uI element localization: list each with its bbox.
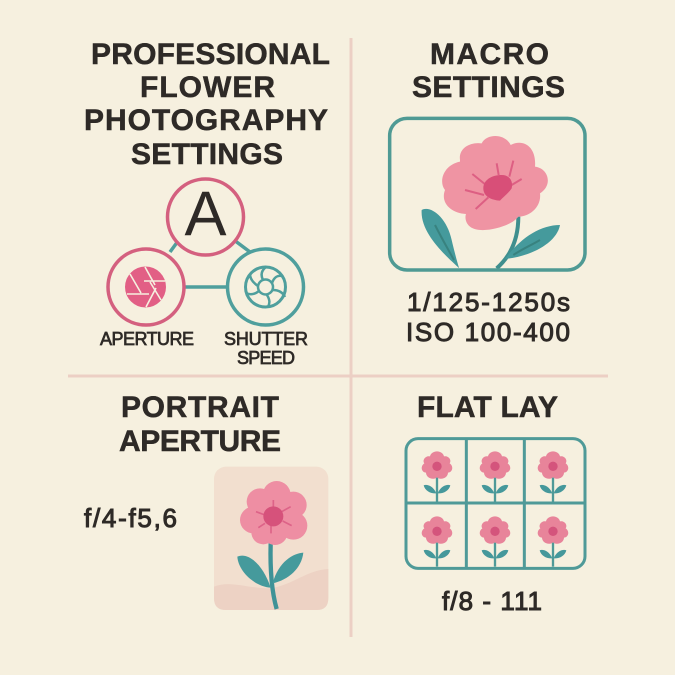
icon: aperture <box>108 249 184 325</box>
icon: macro flower <box>442 136 548 230</box>
label: shutter speed: SHUTTER <box>224 329 308 349</box>
heading: macro settings: SETTINGS <box>412 71 565 104</box>
heading: macro settings <box>412 38 565 104</box>
flower: top left <box>422 451 452 502</box>
title: PHOTOGRAPHY <box>84 104 328 137</box>
flat lay grid <box>406 439 585 568</box>
heading: flat lay: FLAT LAY <box>417 391 558 424</box>
card background <box>214 467 328 610</box>
macro shutter and ISO values: ISO 100-400 <box>406 317 570 347</box>
heading: macro settings: MACRO <box>430 38 549 71</box>
macro flower frame <box>390 118 585 270</box>
title: PROFESSIONAL <box>91 38 330 71</box>
portrait flower card <box>214 467 328 610</box>
heading: portrait aperture: PORTRAIT <box>121 391 279 424</box>
exposure triangle diagram <box>100 179 308 368</box>
heading: portrait aperture <box>119 391 281 458</box>
icon: shutter speed <box>228 249 304 325</box>
label: aperture: APERTURE <box>100 329 194 349</box>
flower: bottom middle <box>480 516 510 567</box>
flower: bottom right <box>538 516 568 567</box>
title: FLOWER <box>140 71 275 104</box>
heading: portrait aperture: APERTURE <box>119 425 281 458</box>
label: shutter speed: SPEED <box>237 348 295 368</box>
flower: top right <box>538 451 568 502</box>
icon: aperture priority A: A <box>184 179 227 249</box>
icon: portrait flower <box>214 481 328 610</box>
title: SETTINGS <box>131 138 283 171</box>
portrait aperture value: f/4-f5,6 <box>84 503 177 533</box>
icon: aperture priority A <box>168 179 244 255</box>
title <box>84 38 330 171</box>
macro shutter and ISO values: 1/125-1250s <box>407 287 570 317</box>
icon: macro stem and leaves <box>422 209 560 268</box>
grid frame <box>406 439 585 568</box>
label: shutter speed <box>224 329 308 368</box>
flower: bottom left <box>422 516 452 567</box>
macro shutter and ISO values <box>406 287 570 347</box>
flat lay aperture value: f/8 - 111 <box>442 586 542 616</box>
flower: top middle <box>480 451 510 502</box>
